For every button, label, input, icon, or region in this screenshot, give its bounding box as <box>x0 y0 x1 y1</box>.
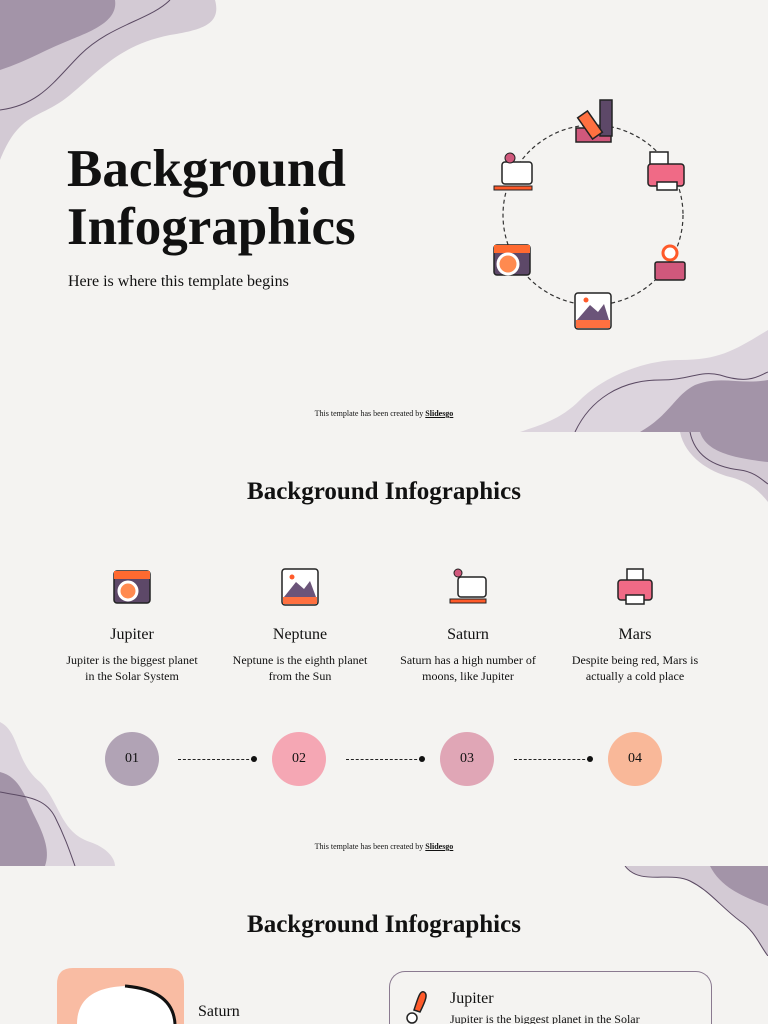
credit: This template has been created by Slidesgo <box>315 842 453 851</box>
title <box>67 140 356 256</box>
subtitle: Here is where this template begins <box>68 273 289 290</box>
timeline: 02 <box>292 751 306 766</box>
column: Saturn <box>400 568 536 683</box>
title: Infographics <box>67 198 356 256</box>
heading: Background Infographics <box>247 478 521 505</box>
credit: This template has been created by Slidesgo <box>315 409 453 418</box>
column: Mars: Despite being red, Mars is actually a cold place <box>572 653 698 683</box>
decoration: top-left blobs <box>0 0 216 160</box>
column: Neptune: Neptune is the eighth planet from the Sun <box>233 653 367 683</box>
decoration: bottom-right blobs <box>520 330 768 432</box>
column: Jupiter: Jupiter is the biggest planet in the Solar System <box>66 653 198 683</box>
panel: Saturn card <box>57 968 184 1024</box>
icon: brush <box>406 991 427 1024</box>
timeline: 04 <box>628 751 642 766</box>
icon: desk lamp monitor <box>494 153 532 190</box>
column: Neptune <box>233 568 368 683</box>
icon: printer <box>617 568 653 605</box>
slide 3 <box>0 866 768 1024</box>
decoration: top-right blobs <box>680 432 768 502</box>
column: Neptune: Neptune <box>273 626 327 643</box>
decoration: bottom-left blobs <box>0 722 115 866</box>
slide 1 <box>0 0 768 432</box>
column: Jupiter: Jupiter <box>110 626 154 643</box>
icon: person laptop <box>655 246 685 280</box>
column: Jupiter <box>66 570 198 683</box>
icon: picture <box>575 293 611 329</box>
timeline: 03 <box>460 751 474 766</box>
icon: camera <box>113 570 151 604</box>
timeline: 01 <box>125 751 139 766</box>
icon: camera <box>494 245 530 275</box>
icon: swatches <box>576 100 612 142</box>
panel: Jupiter box: Jupiter <box>450 990 494 1007</box>
label: Saturn: Saturn <box>198 1003 240 1020</box>
slide 2 <box>0 432 768 866</box>
icon: printer <box>648 152 684 190</box>
title: Background <box>67 140 346 198</box>
decoration: top-right blobs <box>624 866 768 956</box>
icon: lamp monitor <box>450 568 487 604</box>
icon ring diagram <box>493 99 686 330</box>
icon: picture <box>281 568 319 606</box>
panel: Jupiter box <box>389 971 712 1024</box>
heading: Background Infographics <box>247 911 521 938</box>
column: Saturn: Saturn <box>447 626 489 643</box>
column: Mars <box>572 568 698 683</box>
timeline <box>105 732 662 786</box>
column: Saturn: Saturn has a high number of moons, like Jupiter <box>400 653 536 683</box>
column: Mars: Mars <box>619 626 651 643</box>
